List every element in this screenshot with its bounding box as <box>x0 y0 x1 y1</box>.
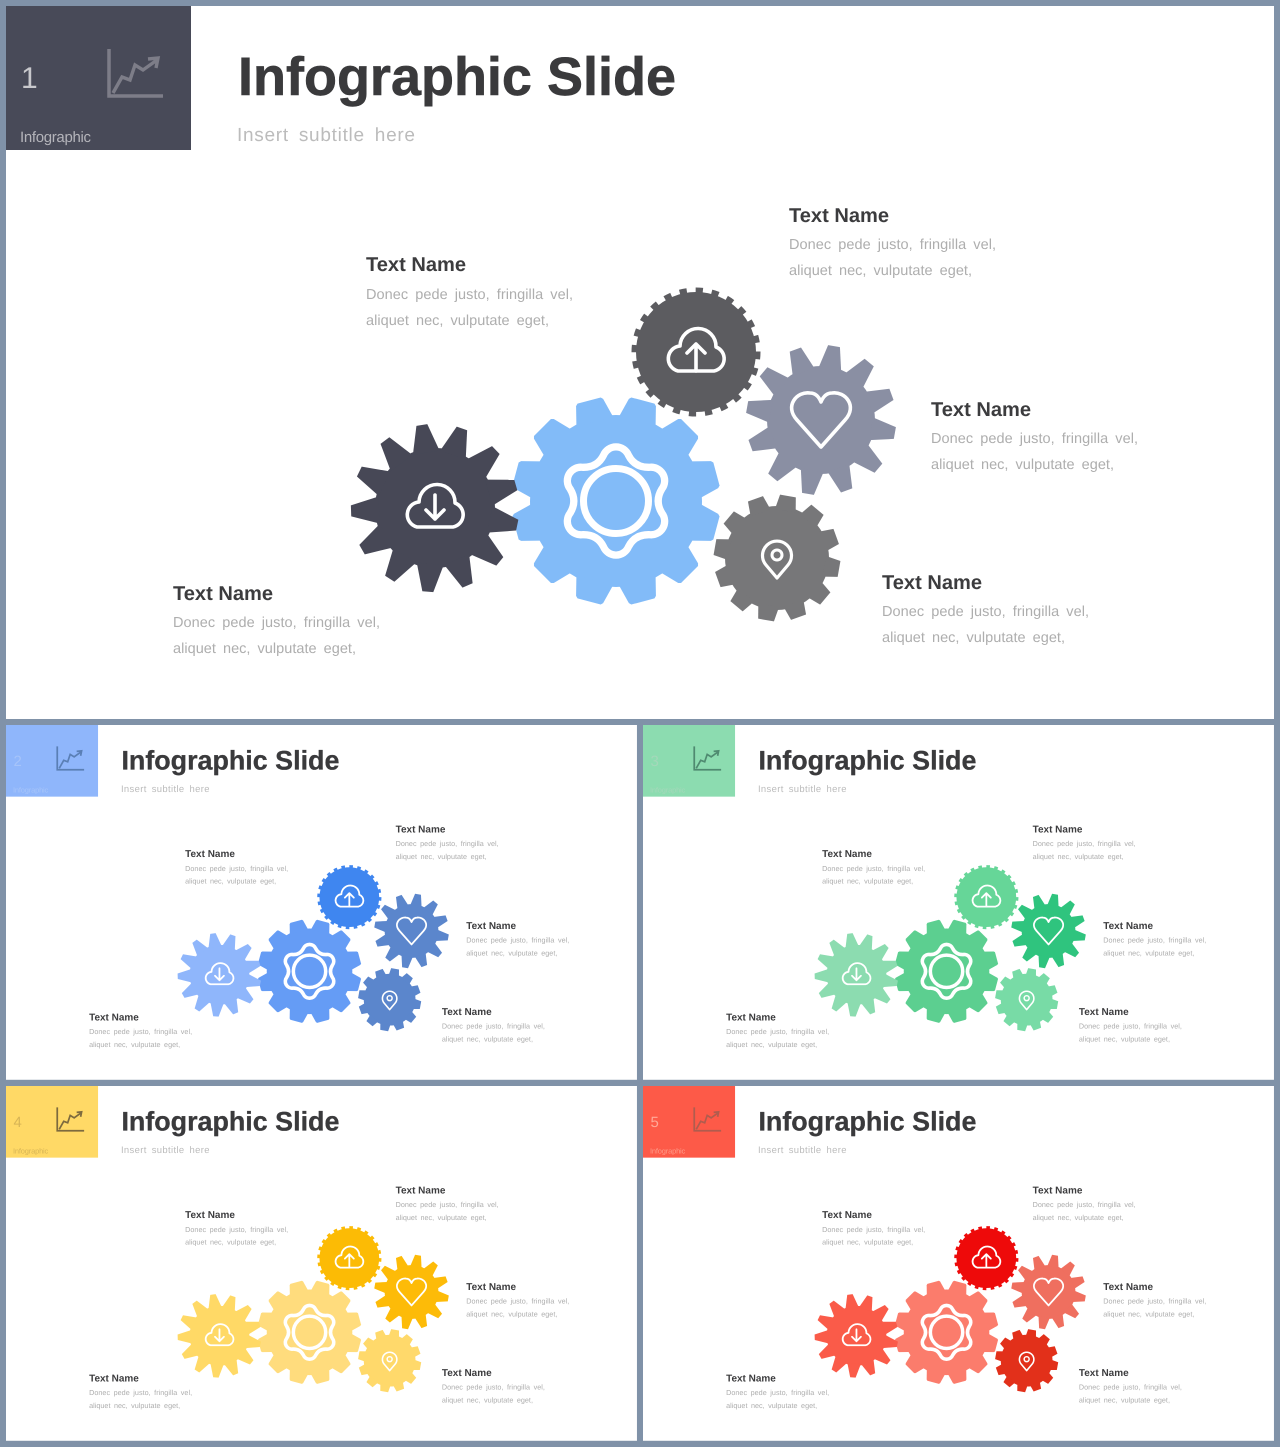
header tab <box>6 6 191 150</box>
gear: center settings <box>511 396 721 606</box>
text block: lower left <box>726 1373 829 1410</box>
text block: top left: aliquet nec, vulputate eget, <box>822 878 913 886</box>
gear: heart <box>374 1254 449 1330</box>
text block: top left: aliquet nec, vulputate eget, <box>366 313 549 329</box>
text block: top: Donec pede justo, fringilla vel, <box>396 1201 499 1209</box>
text block: right: Donec pede justo, fringilla vel, <box>931 431 1138 447</box>
gear: center settings <box>257 919 362 1024</box>
header tab: 3 <box>650 753 659 769</box>
text block: lower right: Text Name <box>882 572 982 594</box>
subtitle: Insert subtitle here <box>758 1145 847 1156</box>
text block: top left <box>366 254 573 329</box>
text block: lower right: Text Name <box>442 1007 492 1018</box>
text block: top: Text Name <box>396 1185 445 1196</box>
gear: cloud upload <box>634 290 758 414</box>
text block: lower left: Text Name <box>726 1012 776 1023</box>
text block: lower left: aliquet nec, vulputate eget, <box>726 1041 817 1049</box>
text block: lower right: Donec pede justo, fringilla vel, <box>1079 1384 1182 1392</box>
text block: lower right: Donec pede justo, fringilla vel, <box>442 1023 545 1031</box>
text block: top left: Donec pede justo, fringilla vel, <box>822 865 925 873</box>
text block: lower right: aliquet nec, vulputate eget, <box>1079 1396 1170 1404</box>
gear: cloud upload <box>956 867 1017 928</box>
text block: right: Text Name <box>466 921 516 931</box>
text block: right: aliquet nec, vulputate eget, <box>466 1310 557 1318</box>
text block: top left <box>185 1209 288 1247</box>
gear: heart <box>745 344 897 496</box>
text block: lower right: aliquet nec, vulputate eget, <box>1079 1035 1170 1043</box>
text block: top left: aliquet nec, vulputate eget, <box>185 1239 276 1247</box>
text block: lower left: aliquet nec, vulputate eget, <box>726 1402 817 1410</box>
header tab: Infographic <box>650 1147 686 1156</box>
gear: cloud upload <box>319 1228 380 1289</box>
slide 3: green panel <box>643 725 1274 1080</box>
text block: right: Text Name <box>931 399 1031 421</box>
text block: lower right: Donec pede justo, fringilla vel, <box>882 604 1089 620</box>
text block: lower left: aliquet nec, vulputate eget, <box>89 1402 180 1410</box>
gear: map pin <box>995 968 1058 1031</box>
text block: top left: aliquet nec, vulputate eget, <box>185 878 276 886</box>
header tab: 2 <box>13 753 22 769</box>
text block: right: aliquet nec, vulputate eget, <box>1103 949 1194 957</box>
title: Infographic Slide <box>121 745 339 775</box>
gear: map pin <box>995 1329 1058 1392</box>
text block: right: aliquet nec, vulputate eget, <box>931 457 1114 473</box>
text block: lower right <box>1079 1368 1182 1404</box>
text block: lower right: aliquet nec, vulputate eget, <box>442 1396 533 1404</box>
subtitle: Insert subtitle here <box>758 784 847 795</box>
text block: top: Text Name <box>1033 824 1082 835</box>
text block: right: Donec pede justo, fringilla vel, <box>466 936 569 944</box>
slide 2: blue panel <box>6 725 637 1080</box>
gear: map pin <box>358 968 421 1031</box>
header tab: 5 <box>650 1114 659 1130</box>
text block: lower left: Text Name <box>89 1373 139 1384</box>
header tab: 4 <box>13 1114 22 1130</box>
text block: lower left <box>89 1373 192 1410</box>
gear: center settings <box>257 1280 362 1385</box>
text block: lower left: Donec pede justo, fringilla vel, <box>726 1028 829 1036</box>
text block: lower left: Text Name <box>89 1012 139 1023</box>
gear: heart <box>1011 1254 1086 1330</box>
gear: cloud download <box>351 423 520 593</box>
text block: right: Donec pede justo, fringilla vel, <box>466 1297 569 1305</box>
text block: lower right <box>442 1368 545 1404</box>
gear: cloud upload <box>319 867 380 928</box>
text block: top: aliquet nec, vulputate eget, <box>1033 853 1124 861</box>
gear: map pin <box>358 1329 421 1392</box>
text block: top <box>396 824 499 861</box>
text block: top left <box>822 848 925 886</box>
header tab: 1 <box>21 62 38 95</box>
header tab: Infographic <box>20 129 92 146</box>
gear: center settings <box>894 1280 999 1385</box>
text block: lower right: Text Name <box>1079 1368 1129 1379</box>
subtitle: Insert subtitle here <box>121 1145 210 1156</box>
text block: top: Donec pede justo, fringilla vel, <box>1033 1201 1136 1209</box>
text block: lower left <box>173 583 380 657</box>
header tab: Infographic <box>13 1147 49 1156</box>
text block: top left: Text Name <box>366 254 466 276</box>
text block: top <box>1033 1185 1136 1222</box>
gear: cloud download <box>177 1293 262 1378</box>
text block: top: Text Name <box>396 824 445 835</box>
text block: top: aliquet nec, vulputate eget, <box>1033 1214 1124 1222</box>
gear: cloud upload <box>956 1228 1017 1289</box>
text block: right <box>1103 921 1206 957</box>
text block: right <box>466 1282 569 1318</box>
gear: cloud download <box>814 932 899 1017</box>
text block: right: aliquet nec, vulputate eget, <box>1103 1310 1194 1318</box>
gear: map pin <box>713 494 841 622</box>
text block: lower right: aliquet nec, vulputate eget, <box>442 1035 533 1043</box>
text block: lower right <box>442 1007 545 1043</box>
text block: top: Donec pede justo, fringilla vel, <box>396 840 499 848</box>
text block: right: Donec pede justo, fringilla vel, <box>1103 1297 1206 1305</box>
text block: top: aliquet nec, vulputate eget, <box>396 1214 487 1222</box>
text block: top <box>396 1185 499 1222</box>
gear: cloud download <box>177 932 262 1017</box>
text block: lower left: Donec pede justo, fringilla vel, <box>89 1389 192 1397</box>
gear: cloud download <box>814 1293 899 1378</box>
slide 5: red panel <box>643 1086 1274 1441</box>
text block: top left <box>185 848 288 886</box>
text block: lower left <box>726 1012 829 1049</box>
text block: top left: Text Name <box>185 848 235 859</box>
text block: lower left: Text Name <box>726 1373 776 1384</box>
text block: right: Text Name <box>1103 1282 1153 1292</box>
text block: lower right: Text Name <box>442 1368 492 1379</box>
text block: right <box>1103 1282 1206 1318</box>
text block: lower right <box>1079 1007 1182 1043</box>
text block: right: Donec pede justo, fringilla vel, <box>1103 936 1206 944</box>
text block: top <box>789 205 996 279</box>
title: Infographic Slide <box>121 1106 339 1136</box>
text block: lower left: Donec pede justo, fringilla vel, <box>173 615 380 631</box>
text block: top left <box>822 1209 925 1247</box>
gear: heart <box>374 893 449 969</box>
text block: lower right: Donec pede justo, fringilla vel, <box>442 1384 545 1392</box>
text block: top left: Text Name <box>822 848 872 859</box>
slide 4: yellow panel <box>6 1086 637 1441</box>
text block: lower left: Text Name <box>173 583 273 605</box>
gear: center settings <box>894 919 999 1024</box>
text block: top left: aliquet nec, vulputate eget, <box>822 1239 913 1247</box>
header tab <box>6 725 98 797</box>
text block: right <box>466 921 569 957</box>
text block: lower left: Donec pede justo, fringilla vel, <box>89 1028 192 1036</box>
text block: lower left: aliquet nec, vulputate eget, <box>89 1041 180 1049</box>
title: Infographic Slide <box>758 745 976 775</box>
text block: top: Text Name <box>789 205 889 227</box>
subtitle: Insert subtitle here <box>237 125 415 146</box>
text block: top: aliquet nec, vulputate eget, <box>396 853 487 861</box>
header tab <box>643 725 735 797</box>
text block: top left: Donec pede justo, fringilla vel, <box>822 1226 925 1234</box>
text block: right: Text Name <box>466 1282 516 1292</box>
text block: lower right <box>882 572 1089 646</box>
header tab: Infographic <box>13 786 49 795</box>
gear: heart <box>1011 893 1086 969</box>
text block: right: Text Name <box>1103 921 1153 931</box>
text block: right <box>931 399 1138 473</box>
text block: top: Donec pede justo, fringilla vel, <box>1033 840 1136 848</box>
header tab <box>6 1086 98 1158</box>
text block: lower left <box>89 1012 192 1049</box>
text block: top: Text Name <box>1033 1185 1082 1196</box>
text block: top left: Donec pede justo, fringilla vel, <box>185 1226 288 1234</box>
header tab <box>643 1086 735 1158</box>
slide 1: main panel <box>6 6 1274 719</box>
subtitle: Insert subtitle here <box>121 784 210 795</box>
text block: top <box>1033 824 1136 861</box>
text block: lower right: Text Name <box>1079 1007 1129 1018</box>
text block: top left: Donec pede justo, fringilla vel, <box>366 287 573 303</box>
text block: top: Donec pede justo, fringilla vel, <box>789 237 996 253</box>
text block: lower right: aliquet nec, vulputate eget, <box>882 630 1065 646</box>
title: Infographic Slide <box>758 1106 976 1136</box>
text block: right: aliquet nec, vulputate eget, <box>466 949 557 957</box>
title: Infographic Slide <box>238 47 676 107</box>
text block: top left: Donec pede justo, fringilla vel, <box>185 865 288 873</box>
text block: lower left: Donec pede justo, fringilla vel, <box>726 1389 829 1397</box>
header tab: Infographic <box>650 786 686 795</box>
text block: lower right: Donec pede justo, fringilla vel, <box>1079 1023 1182 1031</box>
text block: top left: Text Name <box>185 1209 235 1220</box>
text block: top: aliquet nec, vulputate eget, <box>789 263 972 279</box>
text block: top left: Text Name <box>822 1209 872 1220</box>
text block: lower left: aliquet nec, vulputate eget, <box>173 641 356 657</box>
